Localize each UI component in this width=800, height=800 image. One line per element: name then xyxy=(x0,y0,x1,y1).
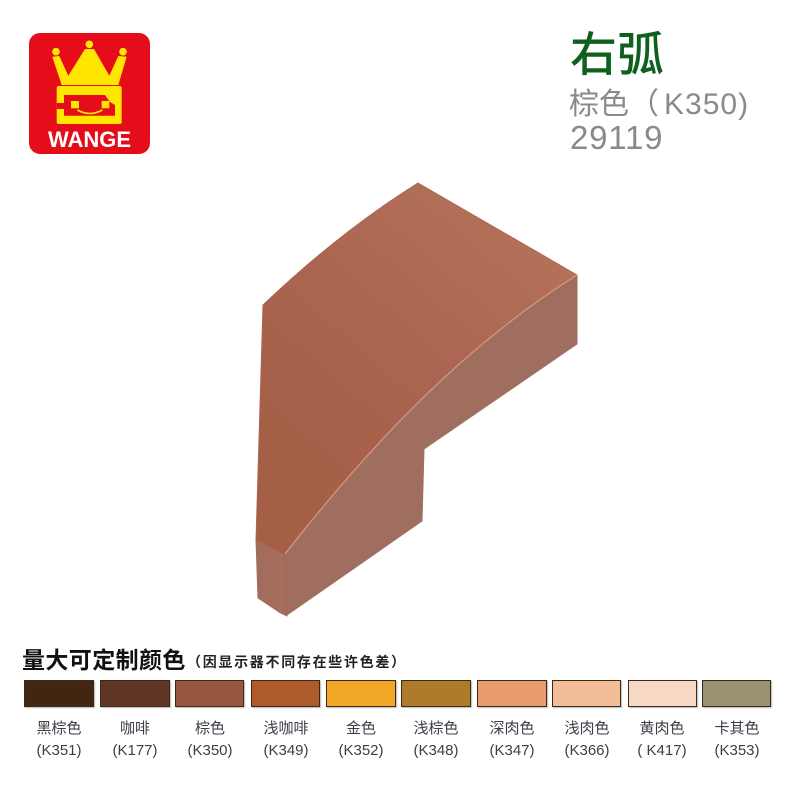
swatch: K352 xyxy=(326,680,396,707)
label: K350: 棕色 xyxy=(195,720,225,737)
label: K350 xyxy=(187,720,233,759)
label: K347: (K347) xyxy=(489,742,535,759)
front face xyxy=(256,540,287,616)
colour swatches xyxy=(24,680,772,759)
label: K351: (K351) xyxy=(36,742,82,759)
label: K348: (K348) xyxy=(413,742,459,759)
label: K349 xyxy=(263,720,309,759)
swatch: K349 xyxy=(251,680,320,707)
label: K348: 浅棕色 xyxy=(413,720,458,737)
label: K353 xyxy=(714,720,760,759)
label: K417 xyxy=(637,720,687,759)
label: K350: (K350) xyxy=(187,742,233,759)
swatch: K177 xyxy=(100,680,170,707)
label: K177: 咖啡 xyxy=(120,720,150,737)
title: part name: 右弧 xyxy=(570,28,664,81)
swatch: K348 xyxy=(401,680,471,707)
swatch: K366 xyxy=(552,680,621,707)
label: K417: ( K417) xyxy=(637,742,687,759)
swatch: K351 xyxy=(24,680,94,707)
label: K347 xyxy=(489,720,535,759)
label: K349: (K349) xyxy=(263,742,309,759)
label: K348 xyxy=(413,720,459,759)
label: K366 xyxy=(564,720,610,759)
subtitle: colour name: 棕色（K350) xyxy=(569,88,749,121)
swatch: K347 xyxy=(477,680,547,707)
edge highlight xyxy=(285,275,577,554)
swatch: K353 xyxy=(702,680,771,707)
swatch: K417 xyxy=(628,680,697,707)
top sloped face xyxy=(256,183,577,555)
label: K352: (K352) xyxy=(338,742,384,759)
label: K353: (K353) xyxy=(714,742,760,759)
label: K352 xyxy=(338,720,384,759)
logo: WANGE crown xyxy=(29,33,150,154)
label: K351 xyxy=(36,720,82,759)
label: K366: (K366) xyxy=(564,742,610,759)
label: K177: (K177) xyxy=(112,742,158,759)
label: K349: 浅咖啡 xyxy=(263,720,308,737)
side face xyxy=(284,275,577,615)
label: K352: 金色 xyxy=(346,720,376,737)
label: K417: 黄肉色 xyxy=(639,720,684,737)
logo: WANGE crown: WANGE xyxy=(48,127,131,152)
label: K353: 卡其色 xyxy=(714,720,760,737)
label: K347: 深肉色 xyxy=(489,720,534,737)
swatch: K350 xyxy=(175,680,244,707)
label: K351: 黑棕色 xyxy=(36,720,82,737)
heading: custom colours: 量大可定制颜色 xyxy=(22,647,186,673)
note: colour difference: （因显示器不同存在些许色差） xyxy=(187,654,407,670)
product: curved slope brick xyxy=(256,182,578,616)
label: K366: 浅肉色 xyxy=(564,720,610,737)
part number: 29119 xyxy=(570,119,663,156)
label: K177 xyxy=(112,720,158,759)
